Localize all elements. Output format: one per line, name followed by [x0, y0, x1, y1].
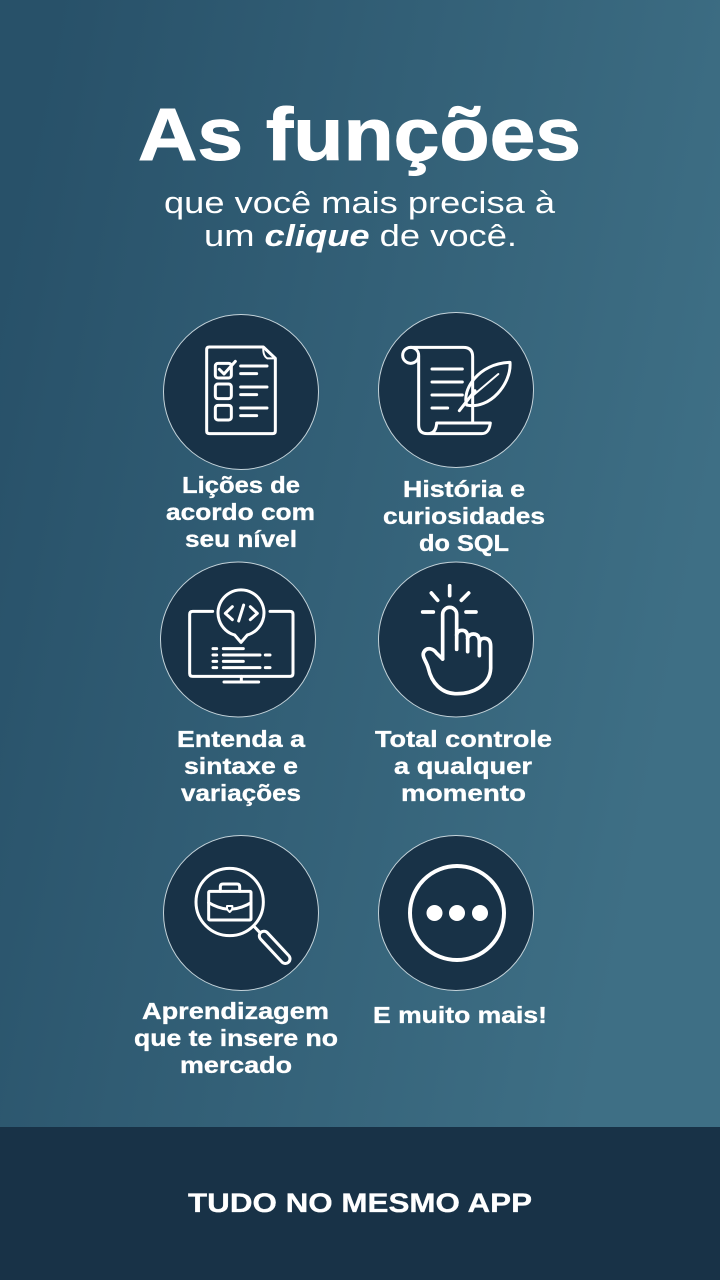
- label: [166, 472, 315, 552]
- label: E muito mais!: [373, 1002, 547, 1028]
- label: Lições de: [182, 472, 300, 498]
- label: seu nível: [185, 526, 297, 552]
- icon: three dots: [378, 836, 534, 990]
- icon: magnifier with briefcase: [164, 836, 318, 990]
- panel: lições: [164, 314, 318, 552]
- label: acordo com: [166, 499, 315, 525]
- label: sintaxe e: [184, 753, 298, 779]
- label: momento: [401, 780, 526, 806]
- icon: checklist: [164, 314, 318, 470]
- panel: sintaxe: [160, 562, 316, 806]
- label: variações: [181, 780, 301, 806]
- icon: monitor with code bubble: [160, 562, 316, 717]
- label: mercado: [180, 1052, 292, 1078]
- subtitle: um clique de você.: [204, 218, 517, 253]
- label: Aprendizagem: [142, 998, 329, 1024]
- label: [375, 726, 552, 806]
- label: curiosidades: [383, 503, 545, 529]
- label: que te insere no: [134, 1025, 338, 1051]
- subtitle: [164, 185, 556, 253]
- label: [177, 726, 305, 806]
- label: Total controle: [375, 726, 552, 752]
- panel: mercado: [134, 836, 338, 1078]
- subtitle: que você mais precisa à: [164, 185, 556, 220]
- label: [134, 998, 338, 1078]
- label: [383, 476, 545, 556]
- footer text: TUDO NO MESMO APP: [188, 1188, 532, 1218]
- icon: scroll and quill: [378, 312, 534, 468]
- panel: mais: [373, 836, 547, 1028]
- label: do SQL: [419, 530, 509, 556]
- panel: controle: [375, 562, 552, 806]
- title: As funções: [138, 93, 581, 176]
- label: a qualquer: [394, 753, 532, 779]
- footer band: [0, 1127, 720, 1280]
- icon: clicking hand: [378, 562, 534, 717]
- label: Entenda a: [177, 726, 305, 752]
- label: História e: [403, 476, 525, 502]
- panel: história: [378, 312, 545, 556]
